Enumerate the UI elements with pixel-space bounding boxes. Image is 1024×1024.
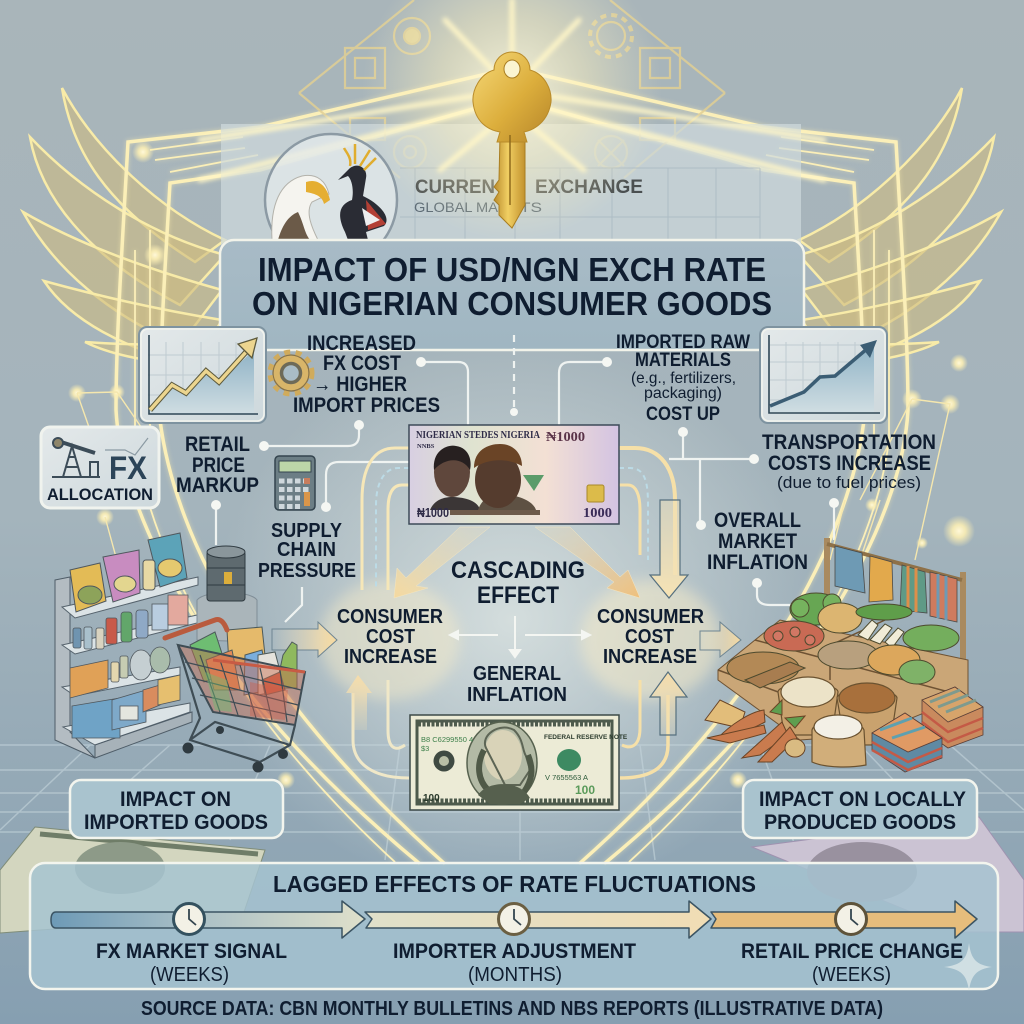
crates [718,620,968,740]
stage labels: FX MARKET SIGNAL [96,940,287,963]
cross arrows [450,616,590,657]
portraits [430,444,536,510]
icon: eagle and crowned crane [265,134,397,266]
icon: calculator [275,456,315,510]
text: retail price markup: MARKUP [176,474,259,497]
text: imported raw materials [616,332,750,425]
stage labels: (WEEKS) [150,964,229,986]
FX allocation badge [41,427,159,508]
text: general inflation: INFLATION [467,684,567,706]
basket [178,645,305,725]
flow arrow: note to left consumer cost [394,527,490,598]
timeline heading: LAGGED EFFECTS OF RATE FLUCTUATIONS [273,871,756,897]
background document: currency exchange: EXCHANGE [535,177,643,198]
cart contents [190,627,297,695]
text: imported raw materials: IMPORTED RAW [616,332,750,353]
carrots and ginger [705,700,805,762]
US dollar banknote: $3 [421,744,429,753]
store shelves with goods [55,533,198,758]
heading: cascading effect: CASCADING [451,557,585,584]
text: supply chain pressure: SUPPLY [271,520,343,542]
flow arrow: downward to right consumer cost [650,500,688,598]
stage labels: (WEEKS) [812,964,891,986]
frame [178,645,295,762]
oil barrel on pedestal [197,546,257,642]
produce [727,593,959,688]
text: transportation costs: (due to fuel prices) [777,473,921,492]
connector dots [211,357,839,588]
background currency notes [0,817,1024,933]
naira banknote: ₦1000 [546,430,585,445]
text: general inflation: GENERAL [473,663,561,685]
title panel [220,240,804,350]
title [252,251,772,322]
US dollar banknote [410,715,628,810]
source note: SOURCE DATA: CBN MONTHLY BULLETINS AND NBS REPORTS (ILLUSTRATIVE DATA) [141,998,883,1020]
US dollar banknote: FEDERAL RESERVE NOTE [544,734,628,741]
naira banknote: 1000 [583,506,612,521]
text: imported raw materials: (e.g., fertilizers, [631,370,736,387]
heading: cascading effect [451,557,585,609]
text: imported raw materials: COST UP [646,404,720,425]
FX allocation badge: ALLOCATION [47,485,153,504]
text: consumer cost increase left: INCREASE [344,646,437,668]
icon: gear [270,352,312,394]
stacked cloth [872,687,983,772]
label: impact on locally produced goods: PRODUCED GOODS [764,811,956,834]
text: overall market inflation [707,509,808,574]
stage labels [96,940,963,986]
FX allocation badge: FX [109,450,148,486]
flow arrow: consumer cost to market [700,622,741,657]
US dollar banknote: 100 [423,793,440,804]
panel: lagged effects timeline [30,863,998,989]
naira banknote: NNBS [417,443,435,450]
text: imported raw materials: MATERIALS [635,350,731,371]
flow arrow: upward to left consumer cost [346,675,372,730]
label: impact on locally produced goods [743,780,977,838]
US dollar banknote: V 7655563 A [545,773,588,782]
text: general inflation [467,663,567,706]
text: overall market inflation: OVERALL [714,509,801,532]
timeline arrows [51,901,977,938]
text: consumer cost increase right: CONSUMER [597,606,705,628]
background document: currency exchange [221,124,801,246]
text: increased FX cost: IMPORT PRICES [293,394,440,417]
looping flow lines [353,448,675,778]
text: transportation costs: COSTS INCREASE [768,452,931,475]
text: increased FX cost [293,332,440,417]
flow arrow: note to right consumer cost [535,527,640,598]
naira banknote: NIGERIAN STEDES NIGERIA [416,430,540,441]
hanging textiles [835,546,957,622]
text: overall market inflation: INFLATION [707,551,808,574]
title: IMPACT OF USD/NGN EXCH RATE [258,251,766,288]
shelf goods [70,595,188,738]
light rays around key [200,0,824,240]
flow arrow: upward to right consumer cost [650,672,687,735]
line chart: right [760,327,887,423]
stage labels: RETAIL PRICE CHANGE [741,940,963,963]
text: increased FX cost: INCREASED [307,332,416,355]
text: supply chain pressure: CHAIN [277,539,336,561]
US dollar banknote: B8 C6299550 4 [421,735,473,744]
text: imported raw materials: packaging) [644,385,722,402]
line chart: left [139,327,266,423]
text: retail price markup [176,433,259,497]
text: overall market inflation: MARKET [718,530,797,553]
market stall with produce [705,538,983,772]
clock icons [174,904,866,934]
text: supply chain pressure: PRESSURE [258,560,356,582]
text: retail price markup: RETAIL [185,433,250,456]
text: consumer cost increase left: COST [366,626,415,648]
icon: sparkle [944,943,992,991]
cereal boxes [70,533,187,612]
stage labels: (MONTHS) [468,964,562,986]
label: impact on imported goods: IMPORTED GOODS [84,811,268,834]
background document: currency exchange: CURREN [415,177,495,198]
text: retail price markup: PRICE [192,454,245,477]
naira banknote: ₦1000 [417,505,449,520]
text: consumer cost increase right [597,606,705,668]
label: impact on imported goods [70,780,283,838]
wings and circuit shield [23,68,1001,864]
background document: currency exchange: GLOBAL MA [414,199,499,215]
icon: golden key [473,52,551,228]
text: consumer cost increase right: COST [625,626,674,648]
label: impact on imported goods: IMPACT ON [120,788,231,811]
text: consumer cost increase right: INCREASE [603,646,697,668]
background document: currency exchange: TS [520,199,542,215]
label: impact on locally produced goods: IMPACT ON LOCALLY [759,788,966,811]
connector lines [216,335,834,622]
flow arrow: shelf to consumer cost [272,622,337,657]
naira banknote [409,425,619,524]
background emblems behind key [299,0,725,178]
sacks of grain [778,677,897,767]
glowing circuit nodes [68,141,975,789]
text: increased FX cost: → HIGHER [313,373,407,396]
soft glow behind cost labels [320,580,720,700]
shopping cart [165,619,305,772]
heading: cascading effect: EFFECT [477,582,559,609]
icon: oil pump [52,438,148,477]
text: consumer cost increase left: CONSUMER [337,606,444,628]
US dollar banknote: 100 [575,783,595,797]
text: transportation costs [762,431,936,492]
text: consumer cost increase left [337,606,444,668]
text: transportation costs: TRANSPORTATION [762,431,936,454]
stage labels: IMPORTER ADJUSTMENT [393,940,636,963]
text: supply chain pressure [258,520,356,582]
title: ON NIGERIAN CONSUMER GOODS [252,285,772,322]
text: increased FX cost: FX COST [323,352,401,375]
